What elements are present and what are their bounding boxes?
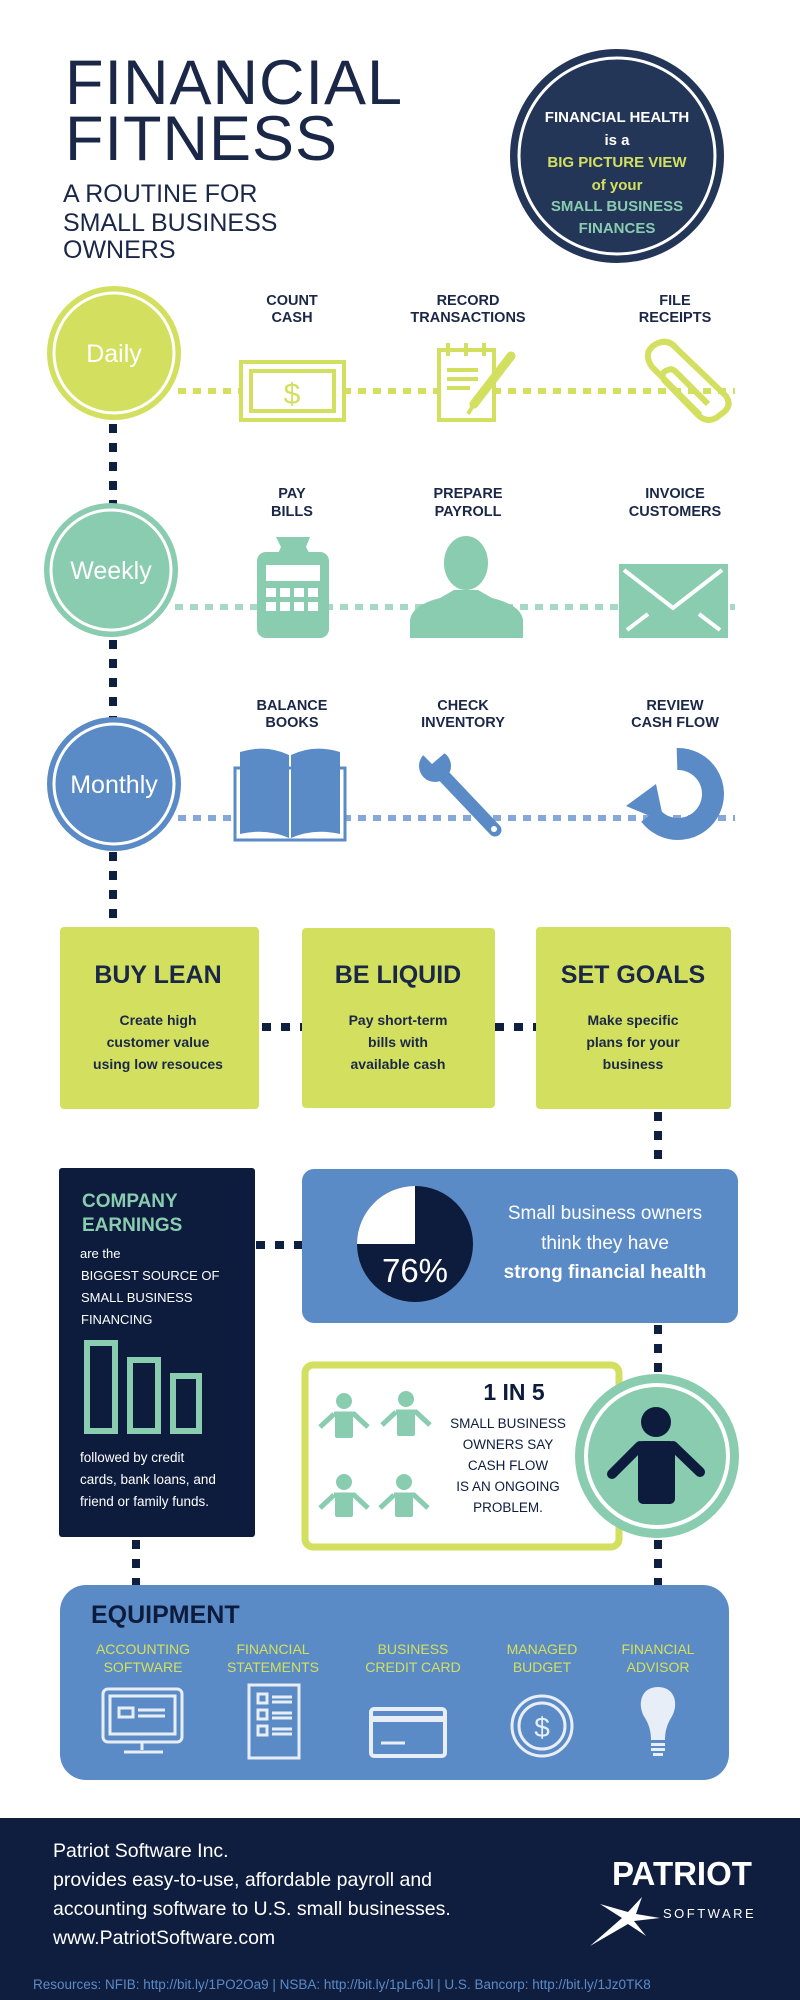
connector dots bbox=[136, 1027, 658, 1585]
box: be liquid bbox=[302, 928, 495, 1108]
title: FINANCIAL bbox=[65, 48, 403, 118]
footer: Patriot Software Inc. bbox=[53, 1840, 229, 1862]
box: set goals bbox=[536, 927, 731, 1109]
task labels: RECORD bbox=[437, 293, 499, 309]
subtitle: SMALL BUSINESS bbox=[63, 209, 277, 237]
panel: company earnings: COMPANY bbox=[82, 1191, 178, 1212]
panel: equipment: FINANCIAL bbox=[621, 1641, 695, 1657]
icon: person (payroll) bbox=[410, 536, 523, 638]
task labels: REVIEW bbox=[646, 698, 704, 714]
panel: company earnings bbox=[59, 1168, 255, 1537]
box: be liquid: bills with bbox=[368, 1034, 428, 1050]
task labels: PREPARE bbox=[433, 486, 503, 502]
task labels: FILE bbox=[659, 293, 691, 309]
title: FITNESS bbox=[65, 104, 338, 174]
panel: company earnings: EARNINGS bbox=[82, 1215, 182, 1236]
panel: 1 in 5: 1 IN 5 bbox=[483, 1379, 545, 1405]
panel: company earnings: FINANCING bbox=[81, 1312, 152, 1327]
footer: accounting software to U.S. small businesses. bbox=[53, 1898, 451, 1920]
circle: Daily: Daily bbox=[86, 340, 142, 368]
vertical timeline dots bbox=[109, 424, 117, 922]
box: be liquid: BE LIQUID bbox=[335, 961, 461, 989]
task labels: CUSTOMERS bbox=[629, 504, 722, 520]
box: buy lean: customer value bbox=[107, 1034, 210, 1050]
box: buy lean: Create high bbox=[119, 1012, 197, 1028]
box: buy lean: BUY LEAN bbox=[94, 961, 222, 989]
weekly row dotted line bbox=[175, 604, 735, 610]
callout circle: financial health: FINANCES bbox=[579, 220, 655, 237]
pie chart: 76% bbox=[382, 1252, 448, 1289]
panel: equipment bbox=[60, 1585, 729, 1780]
panel: 76%: think they have bbox=[541, 1233, 669, 1254]
panel: 76%: Small business owners bbox=[508, 1203, 702, 1224]
logo: patriot software: PATRIOT bbox=[612, 1855, 752, 1892]
panel: company earnings: are the bbox=[80, 1246, 120, 1261]
panel: equipment: ACCOUNTING bbox=[96, 1641, 190, 1657]
task labels: BALANCE bbox=[257, 698, 328, 714]
callout circle: financial health: is a bbox=[604, 132, 630, 149]
bar chart bbox=[87, 1343, 199, 1431]
callout circle: financial health: SMALL BUSINESS bbox=[551, 198, 683, 215]
task labels: COUNT bbox=[266, 293, 318, 309]
icon: big person circle bbox=[575, 1374, 739, 1538]
callout circle: financial health: FINANCIAL HEALTH bbox=[545, 109, 689, 126]
task labels bbox=[257, 293, 722, 731]
panel: equipment: ADVISOR bbox=[626, 1659, 690, 1675]
panel: company earnings: friend or family funds. bbox=[80, 1494, 209, 1509]
icon: light bulb bbox=[641, 1687, 675, 1756]
panel: equipment: STATEMENTS bbox=[227, 1659, 319, 1675]
panel: equipment: CREDIT CARD bbox=[365, 1659, 461, 1675]
box: set goals: business bbox=[603, 1056, 664, 1072]
panel: company earnings: followed by credit bbox=[80, 1450, 185, 1465]
task labels: PAY bbox=[278, 486, 306, 502]
circle: Monthly: Monthly bbox=[70, 771, 158, 799]
panel: 1 in 5: SMALL BUSINESS bbox=[450, 1416, 566, 1431]
icon: credit card bbox=[371, 1709, 445, 1756]
icon: open book bbox=[235, 749, 345, 840]
panel: equipment: FINANCIAL bbox=[236, 1641, 310, 1657]
circle: Daily bbox=[47, 286, 181, 420]
box: buy lean: using low resouces bbox=[93, 1056, 223, 1072]
panel: 1 in 5: CASH FLOW bbox=[468, 1458, 548, 1473]
task labels: BILLS bbox=[271, 504, 313, 520]
task labels: INVENTORY bbox=[421, 715, 505, 731]
panel: equipment: MANAGED bbox=[507, 1641, 577, 1657]
panel: 1 in 5: OWNERS SAY bbox=[463, 1437, 553, 1452]
icon: computer bbox=[103, 1689, 182, 1752]
task labels: INVOICE bbox=[645, 486, 705, 502]
subtitle: OWNERS bbox=[63, 236, 176, 264]
panel: equipment: EQUIPMENT bbox=[91, 1601, 240, 1629]
panel: company earnings: BIGGEST SOURCE OF bbox=[81, 1268, 220, 1283]
panel: company earnings: cards, bank loans, and bbox=[80, 1472, 216, 1487]
task labels: BOOKS bbox=[265, 715, 319, 731]
monthly row dotted line bbox=[178, 815, 735, 821]
daily row dotted line bbox=[178, 388, 735, 394]
panel: equipment: BUDGET bbox=[513, 1659, 572, 1675]
panel: 1 in 5 bbox=[305, 1365, 619, 1547]
footer: provides easy-to-use, affordable payroll and bbox=[53, 1869, 432, 1891]
panel: 1 in 5: PROBLEM. bbox=[473, 1500, 543, 1515]
panel: equipment: SOFTWARE bbox=[104, 1659, 182, 1675]
icon: wrench bbox=[419, 745, 497, 832]
panel: 1 in 5: IS AN ONGOING bbox=[456, 1479, 560, 1494]
icon: statements list bbox=[249, 1685, 299, 1758]
circle: Monthly bbox=[47, 717, 181, 851]
logo: patriot software: SOFTWARE bbox=[663, 1906, 756, 1921]
logo: patriot software bbox=[590, 1855, 756, 1946]
box: set goals: Make specific bbox=[587, 1012, 679, 1028]
callout circle: financial health: BIG PICTURE VIEW bbox=[547, 154, 687, 171]
icon: envelope bbox=[619, 564, 728, 638]
icon: cash: $ bbox=[284, 378, 301, 411]
icon: coin: $ bbox=[534, 1712, 550, 1743]
task labels: CHECK bbox=[437, 698, 489, 714]
box: be liquid: available cash bbox=[351, 1056, 445, 1072]
pie chart bbox=[357, 1186, 473, 1302]
box: buy lean bbox=[60, 927, 259, 1109]
footer bbox=[0, 1818, 800, 2000]
icon: four people bbox=[320, 1391, 430, 1517]
footer: www.PatriotSoftware.com bbox=[52, 1927, 275, 1949]
callout circle: financial health: of your bbox=[592, 177, 643, 194]
icon: paperclip bbox=[648, 342, 729, 420]
panel: equipment: BUSINESS bbox=[378, 1641, 448, 1657]
box: be liquid: Pay short-term bbox=[349, 1012, 447, 1028]
icon: notepad bbox=[439, 343, 511, 420]
task labels: CASH FLOW bbox=[631, 715, 719, 731]
icon: refresh arrow bbox=[626, 759, 713, 829]
task labels: PAYROLL bbox=[435, 504, 502, 520]
task labels: RECEIPTS bbox=[639, 310, 712, 326]
icon: cash bbox=[241, 362, 344, 420]
circle: Weekly: Weekly bbox=[70, 557, 152, 585]
callout circle: financial health bbox=[510, 49, 724, 263]
title bbox=[65, 48, 403, 174]
subtitle bbox=[63, 180, 277, 264]
panel: company earnings: SMALL BUSINESS bbox=[81, 1290, 193, 1305]
panel: 76% bbox=[302, 1169, 738, 1323]
subtitle: A ROUTINE FOR bbox=[63, 180, 257, 208]
resources: Resources: NFIB: http://bit.ly/1PO2Oa9 | NSBA: http://bit.ly/1pLr6Jl | U.S. Bancorp: http://bit.ly/1Jz0TK8 bbox=[33, 1977, 651, 1992]
icon: calculator bbox=[257, 537, 329, 638]
task labels: CASH bbox=[271, 310, 313, 326]
task labels: TRANSACTIONS bbox=[410, 310, 526, 326]
circle: Weekly bbox=[44, 503, 178, 637]
panel: 76%: strong financial health bbox=[504, 1262, 706, 1283]
box: set goals: plans for your bbox=[586, 1034, 680, 1050]
box: set goals: SET GOALS bbox=[561, 961, 705, 989]
icon: coin bbox=[512, 1696, 572, 1756]
